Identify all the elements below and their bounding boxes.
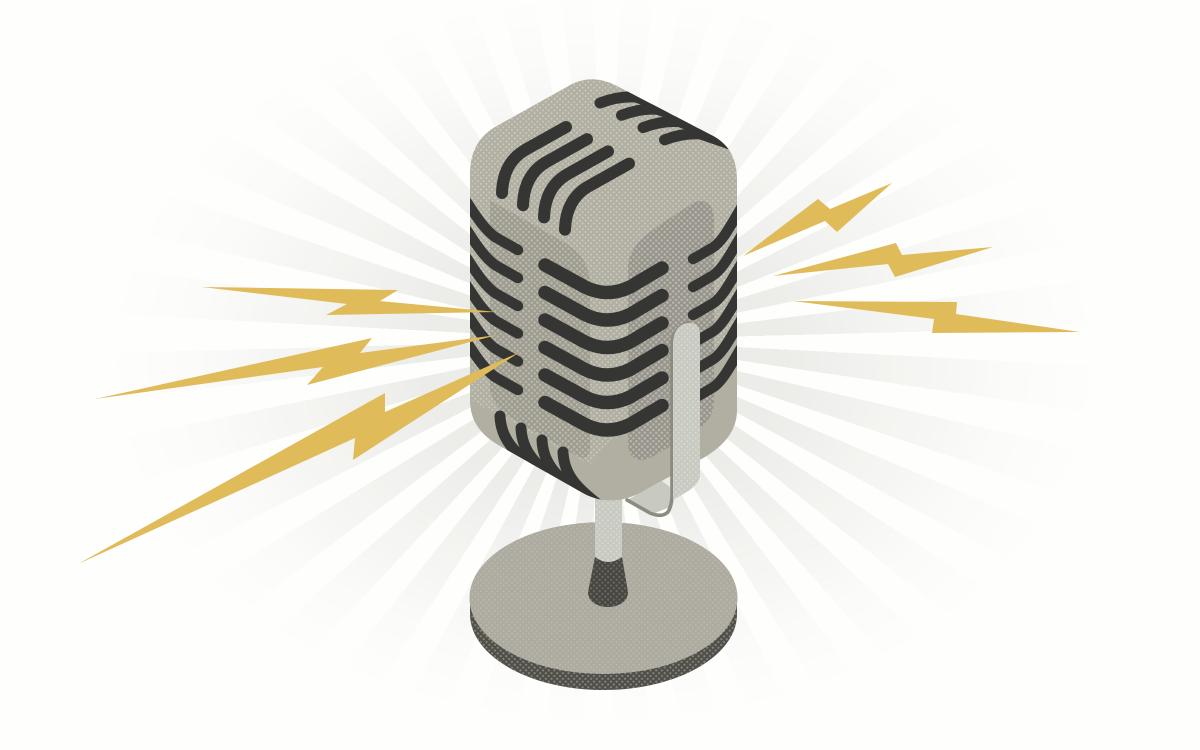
stem shaft (595, 485, 622, 562)
stem dark collar (588, 557, 628, 607)
base top disc (470, 522, 738, 674)
bolt: left middle (95, 335, 497, 399)
microphone stem (588, 485, 628, 607)
shaded patch: right face (628, 201, 714, 460)
head body (470, 79, 737, 500)
bolt: right middle (773, 243, 993, 277)
lightning bolts, right (743, 183, 1080, 333)
grille slots: top right (600, 97, 732, 145)
bolt: right lower (793, 301, 1080, 333)
lightning bolts, left (over the microphone) (78, 287, 520, 564)
bolt: right upper (743, 183, 892, 256)
shaded patch: left face (490, 200, 590, 458)
grille slots: bottom left (500, 416, 605, 510)
yoke lower strap behind the body (627, 481, 670, 513)
base side edge (470, 598, 737, 690)
head halftone texture (470, 79, 737, 465)
illustration canvas (78, 79, 1080, 690)
grille slots: left side bands (470, 198, 524, 396)
microphone yoke handle (627, 323, 700, 515)
bolt: left lower (78, 352, 520, 564)
microphone head (470, 79, 737, 500)
yoke outline (627, 323, 688, 515)
microphone stand base (470, 522, 738, 690)
grille slots: top left (502, 127, 629, 230)
grille slots: right side bands (688, 204, 737, 401)
microphone illustration with lightning bolts (78, 79, 1080, 690)
background: sunburst rays (270, 122, 936, 586)
yoke bar (673, 323, 700, 500)
bolt: left upper (202, 287, 497, 315)
grille slots: center bands (545, 265, 662, 430)
